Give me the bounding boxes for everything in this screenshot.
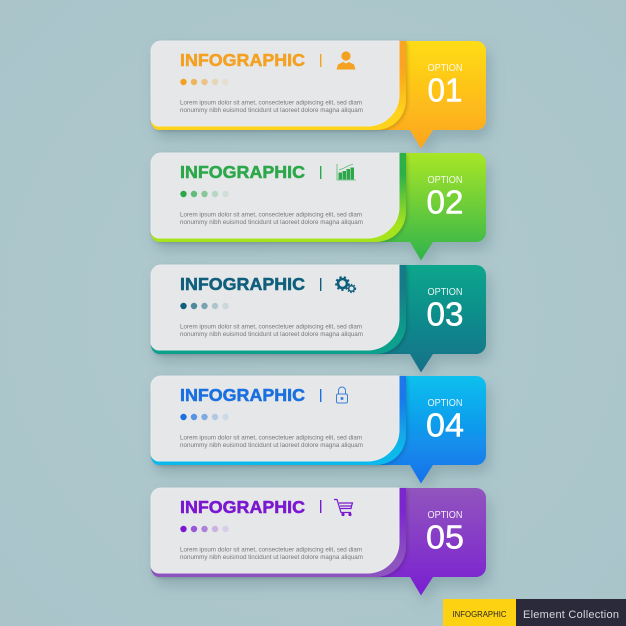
body text 02: nonummy nibh euismod tincidunt ut laoreet dolore magna aliquam	[180, 219, 363, 226]
white card 04	[151, 376, 399, 461]
fold with bottom band 03	[151, 265, 406, 354]
heading 04: INFOGRAPHIC	[180, 385, 305, 405]
colored tab 03	[151, 265, 486, 372]
divider 02	[320, 166, 321, 179]
heading 03: INFOGRAPHIC	[180, 274, 305, 294]
body text 02: Lorem ipsum dolor sit amet, consectetuer adipiscing elit, sed diam	[180, 212, 362, 218]
body text 01: nonummy nibh euismod tincidunt ut laoreet dolore magna aliquam	[180, 107, 363, 114]
panel: option 04	[151, 376, 486, 484]
body text 01	[180, 100, 363, 114]
panel: option 05	[151, 488, 486, 596]
icon: user	[336, 51, 356, 70]
number 02: 02	[426, 184, 464, 222]
fold with bottom band 02	[151, 153, 406, 242]
white card 03	[151, 265, 399, 350]
body text 02	[180, 212, 363, 226]
body text 01: Lorem ipsum dolor sit amet, consectetuer adipiscing elit, sed diam	[180, 100, 362, 106]
colored tab 04	[151, 376, 486, 484]
divider 05	[320, 500, 321, 513]
number 01: 01	[428, 72, 462, 110]
option label 04: OPTION	[428, 398, 462, 409]
divider 01	[320, 54, 321, 67]
number 04: 04	[426, 408, 464, 444]
body text 05	[180, 546, 363, 561]
number 03: 03	[426, 296, 464, 334]
fold with bottom band 01	[151, 41, 406, 130]
rating dots 01	[180, 79, 229, 85]
rating dots 04	[180, 414, 229, 420]
option label 03: OPTION	[428, 287, 462, 298]
body text 03: nonummy nibh euismod tincidunt ut laoreet dolore magna aliquam	[180, 331, 363, 338]
footer label: INFOGRAPHIC	[452, 609, 506, 619]
panel: option 01	[151, 41, 486, 148]
colored tab 01	[151, 41, 486, 148]
fold with bottom band 05	[151, 488, 406, 577]
icon: gears	[336, 277, 356, 292]
body text 04: nonummy nibh euismod tincidunt ut laoreet dolore magna aliquam	[180, 442, 363, 449]
rating dots 02	[180, 191, 229, 197]
option label 01: OPTION	[428, 63, 462, 74]
white card 02	[151, 153, 399, 238]
body text 05: Lorem ipsum dolor sit amet, consectetuer adipiscing elit, sed diam	[180, 546, 362, 554]
icon: shopping cart	[334, 500, 352, 516]
body text 04: Lorem ipsum dolor sit amet, consectetuer adipiscing elit, sed diam	[180, 434, 362, 442]
rating dots 05	[180, 526, 229, 532]
panel: option 02	[151, 153, 486, 260]
colored tab 02	[151, 153, 486, 260]
colored tab 05	[151, 488, 486, 596]
fold with bottom band 04	[151, 376, 406, 465]
icon: bar chart	[337, 164, 356, 180]
body text 04	[180, 434, 363, 449]
white card 05	[151, 488, 399, 573]
body text 03: Lorem ipsum dolor sit amet, consectetuer adipiscing elit, sed diam	[180, 324, 362, 330]
rating dots 03	[180, 303, 229, 309]
body text 03	[180, 324, 363, 338]
heading 05: INFOGRAPHIC	[180, 497, 305, 517]
icon: lock	[336, 387, 348, 403]
footer yellow tag	[443, 599, 516, 626]
number 05: 05	[426, 520, 464, 556]
divider 03	[320, 278, 321, 291]
body text 05: nonummy nibh euismod tincidunt ut laoreet dolore magna aliquam	[180, 554, 363, 561]
divider 04	[320, 389, 321, 402]
panel: option 03	[151, 265, 486, 372]
footer banner	[443, 599, 626, 626]
heading 02: INFOGRAPHIC	[180, 162, 305, 182]
white card 01	[151, 41, 399, 126]
option label 02: OPTION	[428, 175, 462, 186]
footer dark tag	[516, 599, 626, 626]
option label 05: OPTION	[428, 510, 462, 521]
footer title: Element Collection	[523, 609, 619, 621]
heading 01: INFOGRAPHIC	[180, 50, 305, 70]
